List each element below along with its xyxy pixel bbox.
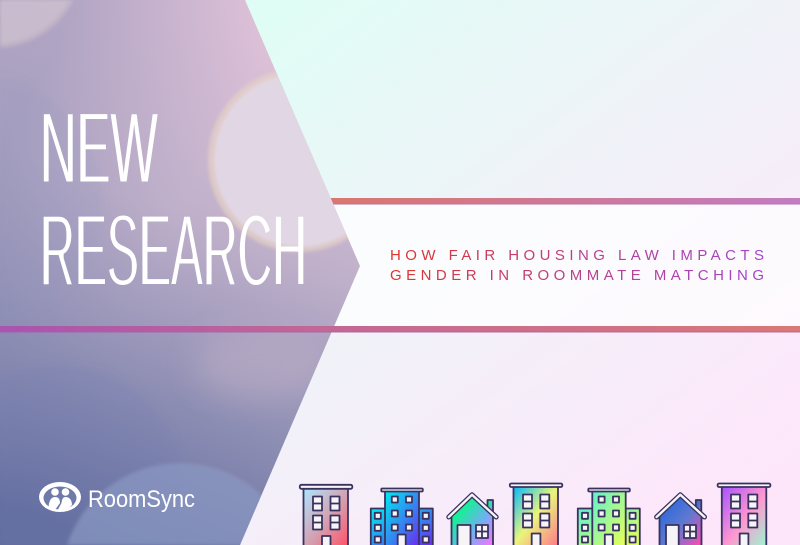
panel: left arrow photo panel bbox=[0, 0, 392, 545]
logo wordmark: RoomSync bbox=[88, 486, 195, 513]
title bbox=[40, 90, 307, 308]
building 5 bbox=[578, 488, 640, 545]
bokeh: top left circle bbox=[0, 0, 73, 48]
bokeh: lower left circle bbox=[0, 365, 185, 545]
bokeh: left blue circle bbox=[0, 77, 103, 323]
building 7 bbox=[718, 484, 770, 545]
infographic canvas: RESEARCH bbox=[40, 192, 307, 308]
row of buildings bbox=[300, 484, 770, 545]
subtitle line 2: GENDER IN ROOMMATE MATCHING bbox=[390, 267, 764, 284]
top stripe bbox=[331, 198, 800, 204]
building 1 bbox=[300, 485, 352, 545]
bokeh: bottom circle bbox=[67, 463, 261, 545]
white centre band bbox=[0, 205, 800, 326]
logo: RoomSync bbox=[39, 482, 195, 513]
house 6 bbox=[657, 495, 704, 545]
logo mark bbox=[39, 482, 81, 512]
bottom stripe bbox=[0, 326, 800, 332]
building 2 bbox=[371, 488, 433, 545]
subtitle line 1: HOW FAIR HOUSING LAW IMPACTS bbox=[390, 247, 764, 264]
title: NEW bbox=[40, 90, 158, 205]
subtitle bbox=[390, 247, 764, 284]
bokeh: large centre circle bbox=[208, 72, 348, 252]
building 4 bbox=[510, 484, 562, 545]
soft glow bbox=[198, 336, 314, 402]
house 3 bbox=[449, 495, 496, 545]
